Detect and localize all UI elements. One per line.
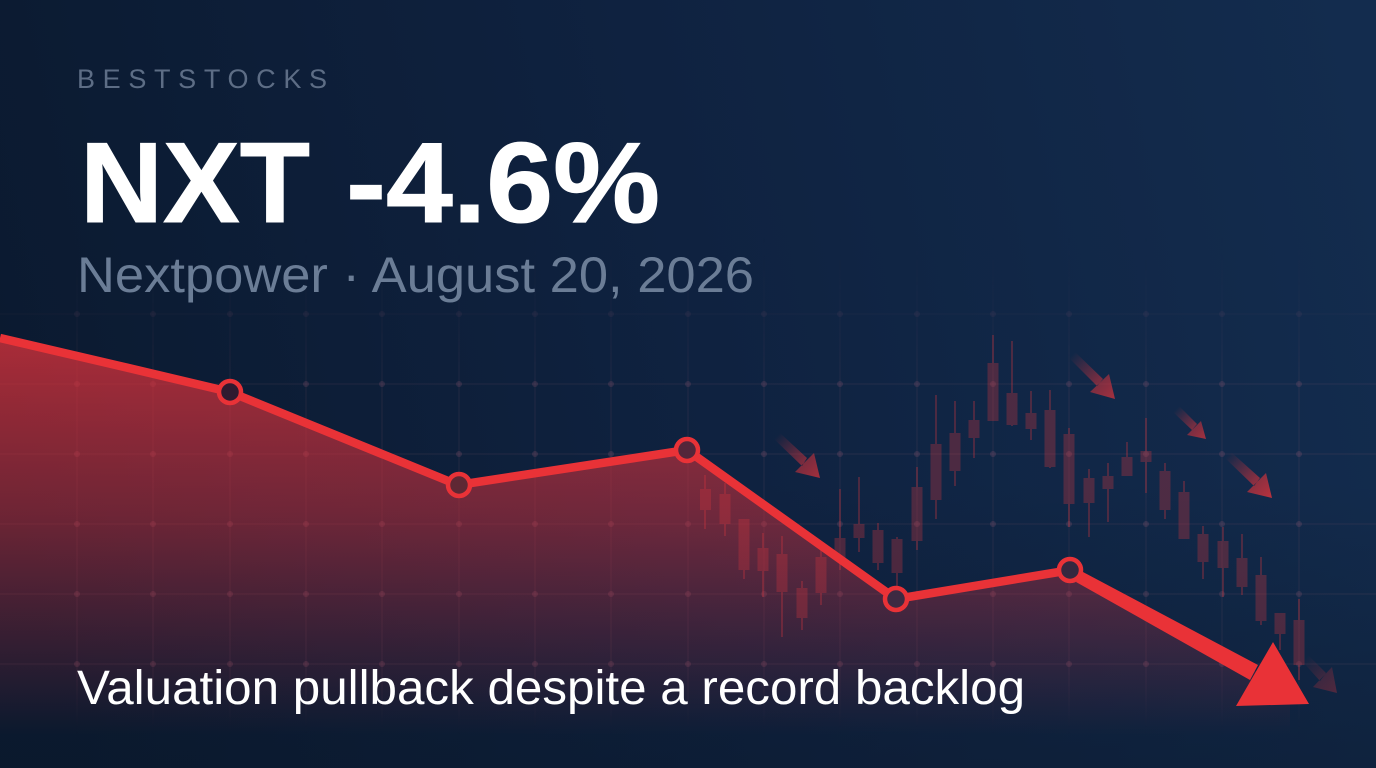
title [80, 120, 660, 247]
trend line [0, 338, 1258, 680]
small arrow 1 [774, 433, 820, 478]
brand label: BESTSTOCKS [77, 64, 327, 94]
data point 5 [1059, 559, 1081, 581]
data point 4 [885, 588, 907, 610]
background grid [0, 311, 1376, 698]
trend line arrowhead [1236, 642, 1309, 706]
small arrow 3 [1173, 406, 1206, 439]
candlestick chart [700, 335, 1304, 680]
small arrow 2 [1069, 352, 1115, 399]
data point 1 [219, 381, 241, 403]
data point 2 [448, 474, 470, 496]
small arrow 4 [1225, 452, 1272, 498]
small arrow 5 [1302, 655, 1337, 693]
subtitle: Nextpower · August 20, 2026 [77, 247, 754, 303]
caption: Valuation pullback despite a record backlog [77, 662, 1025, 715]
red area under trend line [0, 338, 1290, 768]
data point 3 [676, 439, 698, 461]
title: NXT [80, 120, 310, 247]
title: -4.6% [346, 120, 660, 247]
